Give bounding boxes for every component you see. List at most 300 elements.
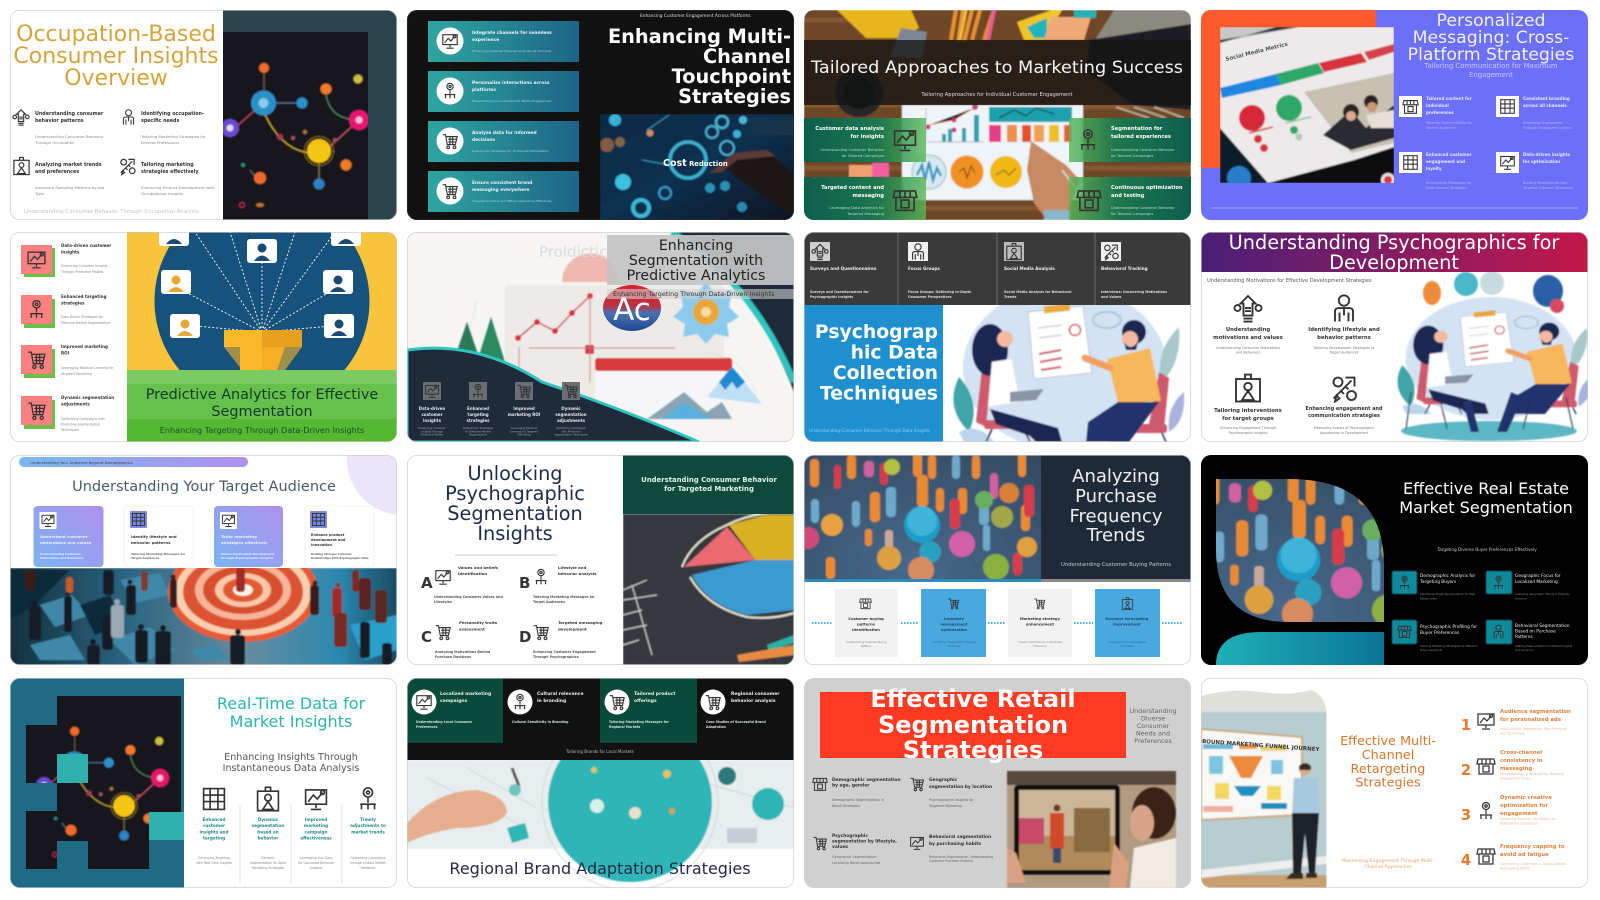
card 12: real estate segmentation [1085,455,1588,752]
subtitle: Enhancing Insights Through [224,752,358,763]
card: enhance: Building Stronger Customer [311,553,352,556]
column: localized: Preferences [416,725,438,729]
panel: optimization: for Tailored Campaigns [1111,212,1153,216]
item: demographic: Retail Strategies [832,804,860,808]
illustration: chart scene [455,232,794,419]
column: tailored: Regional Markets [609,725,640,729]
photo: social media metrics [1220,27,1395,190]
item C: Personality traits [459,620,497,625]
title: Retargeting [1351,762,1425,777]
column: improved: campaign [305,829,327,834]
column: regional: behavior analysis [731,698,776,704]
column: dynamic: Segmentation Techniques [554,433,588,437]
photo: funnel whiteboard [1201,678,1327,888]
item D: Through Psychographics [533,655,579,659]
step: revenue: improvement [1113,622,1141,626]
item B [519,565,597,604]
title: Market Insights [230,712,352,731]
panel: segmentation: for Tailored Campaigns [1111,154,1153,158]
step 3: engagement [1500,811,1538,817]
item: lifestyle: Tailoring Development Strategies to [1314,346,1374,350]
title panel: Trends [1086,525,1145,546]
text: behavior patterns: behavior patterns [35,118,84,124]
step 1: 1 [1461,716,1471,734]
text: market trends: Analyzing market trends [35,163,102,168]
step: inventory: management [940,622,968,626]
title: Segmentation [447,502,583,525]
card: tailor: Tailor marketing [221,534,257,539]
card 3: tailored approaches [804,10,1191,220]
column: enhanced [196,789,232,865]
title: Channel [703,45,791,68]
panel: targeted content: messaging [852,193,884,199]
icon: dollar [13,110,29,125]
title: Platform Strategies [1408,45,1574,65]
item: improved ROI: Improved marketing [61,344,108,349]
title: Occupation-Based [16,22,216,47]
network image [223,32,368,220]
photo: funnel whiteboard: BOUND MARKETING FUNNEL JOURNEY [1202,739,1321,753]
item: data-driven: Data-driven customer [61,243,111,248]
item: motivations [1213,296,1283,354]
step 2: Engagement Rates [1500,776,1531,780]
panel: targeted content: Targeted Messaging [846,212,884,216]
panel: title band: Segmentation [211,404,313,420]
column: tailored [600,678,697,743]
item C: Analyzing Motivations Behind [435,650,490,654]
item: motivations: Understanding Consumer Motivations [1216,346,1280,350]
item: demographic: Identifying Target Demographics for Real [1420,592,1475,596]
item: lifestyle: Target Audiences [1328,350,1359,354]
item: behavioral [911,834,993,863]
item: geographic: Analyzing Geographic Trends in Property [1515,592,1570,596]
item: tailored content: preferences [1426,110,1454,115]
column: targeting: Data-Driven Strategies [463,427,493,430]
card 15: retail segmentation [804,678,1191,888]
text: occupation needs: specific needs [141,118,179,124]
item: behavioral: Based on Purchase [1515,628,1556,634]
header panel: Surveys and Questionnaires [810,266,877,271]
header panel [804,232,1191,305]
step: revenue: Strategies to Increase Repeat [1108,641,1146,644]
subtitle: Tailoring Approaches for Individual Customer Engagement [920,92,1073,98]
title panel: Understanding Consumer Behavior Through Data Insights [809,428,930,433]
column: localized: Understanding Local Consumer [416,720,472,724]
item: demographic: Targeting Buyers [1419,579,1457,585]
photo: planning table [407,714,794,890]
title: Enhancing [659,238,733,254]
icon: person [123,110,134,125]
column: improved: Improved [305,817,327,822]
item: geographic: Psychographic Insights for [929,798,974,802]
column: localized: Localized marketing [440,692,491,697]
red title block [820,692,1126,758]
step 3: 3 [1461,806,1471,824]
title: Regional Brand Adaptation Strategies [449,859,751,878]
item: behavioral: by purchasing habits [929,841,981,847]
card: enhance: development and [311,538,346,542]
item: geographic: Geographic Focus for [1515,574,1561,579]
column: dynamic: adjustments [557,418,586,423]
card: enhance: innovation [311,543,333,547]
column: data-driven: customer [421,412,443,417]
item: demographic: Demographic Analysis for [1420,574,1475,579]
title: Effective Retail [870,685,1076,713]
column: data-driven: Enhancing Customer [418,427,446,430]
column: tailored: Tailored product [634,692,676,697]
column: ROI: Leveraging Machine [511,427,537,430]
step 4: Overcoming Challenges in Cross-Channel [1500,862,1566,866]
text: behavior patterns: Understanding consumer [35,112,103,117]
column: enhanced: Enhanced [203,817,225,822]
header panel: Social Media Analysis [1004,266,1055,271]
column: dynamic: behavior [258,836,279,841]
title panel: Frequency [1070,506,1163,527]
subtitle: Targeting Diverse Buyer Preferences Effectively [1436,547,1537,552]
panel: customer data [804,118,926,162]
card: tailor: strategies effectively [221,540,268,545]
column: dynamic: Dynamic [561,406,581,411]
card 2: multi-channel touchpoints [407,10,794,220]
column: regional: Adaptation [706,725,727,729]
title: Psychographic [445,482,585,505]
item: geographic: Geographic [929,778,957,783]
panel: targeted content: Leveraging Data Analytics for [829,206,884,210]
header text: Enhancing Customer Engagement Across Platforms [640,13,751,19]
title: Overview [64,66,168,91]
column: improved [298,790,335,870]
photo: AR retail tablet [1007,771,1176,888]
column: targeting: targeting [467,412,489,417]
step: buying patterns [835,589,898,657]
desc: marketing: Diverse Professions [141,140,179,145]
panel: title band [127,370,397,442]
column: targeting: strategies [467,418,490,423]
step 1: for personalized ads [1500,717,1561,723]
step 3: Measuring Success: Key Metrics for [1500,817,1556,821]
item: data-driven [21,243,111,277]
title panel [607,235,794,285]
photo: data pegs [1085,464,1493,752]
item: behavioral: Behavioral Segmentation [1515,624,1569,629]
title panel [804,305,943,442]
column: dynamic: based on [257,829,279,834]
item B: Tailoring Marketing Messages for [533,595,595,599]
teal shape [1216,632,1384,665]
item: behavioral [1486,620,1573,652]
card: motivations: Understanding Customer [40,552,81,556]
header panel: Behavioral Tracking [1101,266,1148,271]
column: improved: Analysis [310,866,323,870]
panel: ensure: Ensure consistent brand [472,181,532,186]
column: targeting: Enhanced [467,406,489,411]
item: motivations: motivations and values [1213,335,1283,341]
column: targeting: for Effective Market [465,429,491,433]
panel: customer data: Customer data analysis [815,126,884,132]
column: ROI [508,382,541,437]
item D: Targeted messaging [558,620,602,625]
step: buying patterns: Understanding Customer Buying [846,641,886,644]
green header panel: Understanding Consumer Behavior [641,476,777,484]
header panel: Psychographic Insights [810,295,853,299]
item: lifestyle: Identifying lifestyle and [1308,327,1380,333]
card 10: psychographic segmentation [407,455,794,665]
item: enhanced engagement: Enhanced customer [1426,152,1471,157]
item: tailored content: Tailoring Communication for [1426,121,1472,125]
logo circle [603,285,661,331]
column: cultural: Cultural relevance [537,692,584,697]
title: Understanding Your Target Audience [72,479,336,495]
item C: C [421,628,432,646]
item: geographic: Localized Marketing [1515,579,1558,585]
item: enhanced engagement: Multi-Channel Strategies [1426,186,1467,190]
title: Unlocking [467,462,563,485]
green header panel: for Targeted Marketing [664,485,754,493]
title: Effective Multi- [1340,734,1436,749]
title: Personalized [1437,11,1545,31]
pill label: Understanding Your Audience Beyond Demographics [30,460,133,465]
item: psychographic: Localizing Retail Approaches [832,861,881,865]
title: Predictive Analytics [627,268,765,284]
dark corner panel [407,348,699,442]
step: inventory: optimization [941,628,967,632]
header panel: and Values [1101,295,1121,299]
item D [519,620,603,659]
footer text: Channel Approaches [1364,864,1412,870]
logo circle: Ac [613,292,651,328]
panel: targeted content: Targeted content and [821,185,884,191]
item: psychographic: values [832,844,848,850]
card: lifestyle: Tailoring Marketing Messages for [131,552,185,556]
column: dynamic [250,787,286,870]
column: localized: campaigns [440,698,468,704]
item: data-driven: Enhancing Customer Insights [61,264,108,268]
step: buying patterns: Patterns [861,644,872,648]
column: regional [700,690,780,729]
card 6: predictive segmentation [407,232,794,442]
title: Market Segmentation [1399,498,1573,517]
card 13: real-time data [0,678,397,888]
network image [0,679,251,886]
item D: development [558,626,587,632]
item A [421,565,503,604]
text: tailoring: strategies effectively [141,169,199,175]
card 11: purchase frequency [744,445,1191,685]
side text: Consumer [1137,722,1170,730]
column: dynamic [554,382,588,437]
panel: segmentation: tailored experiences [1111,134,1171,140]
item: geographic [911,777,992,808]
card: lifestyle: Target Audiences [131,556,159,560]
item: psychographic: Buyer Preferences [1420,630,1460,636]
illustration: interview [953,286,1184,450]
card: lifestyle [124,506,193,567]
card 14: regional brand [407,678,794,890]
item: enhanced targeting: Enhanced targeting [61,294,107,299]
column: regional: Case Studies of Successful Brand [706,720,766,724]
item: improved ROI [21,344,114,378]
card: lifestyle: behavior patterns [131,540,171,545]
item: interventions: Tailoring interventions [1214,408,1282,414]
column: improved: effectiveness [300,836,332,841]
panel: ensure [428,171,579,212]
step: marketing: Marketing strategy [1020,617,1060,621]
panel: hero illustration [127,194,397,408]
item A: A [421,574,433,592]
step 3: Dynamic creative [1500,795,1552,801]
title: Segmentation [878,711,1068,739]
desc: product: Occupational Insights [141,191,183,196]
panel: ensure: messaging everywhere [472,187,529,193]
item: engagement [1306,378,1383,435]
card 7: psychographic data collection [804,232,1191,450]
item: behavioral: Behavioral Segmentation: Understanding [929,855,993,859]
header panel: Trends [1004,295,1016,299]
panel: customer data: for insights [850,134,884,140]
item: consistent branding: across all channels [1523,103,1567,108]
item: demographic [1392,571,1475,600]
item: psychographic: Psychographic Profiling for [1420,625,1477,630]
card: motivations: motivations and values [40,540,92,545]
column: timely: market trends [351,829,385,834]
title panel: Techniques [820,384,938,404]
item B: Lifestyle and [558,565,586,570]
item: interventions: Enhancing Engagement Through [1220,426,1276,430]
desc: spending: Type [34,191,45,196]
column: data-driven: Data-driven [419,406,445,411]
header panel: Focus Groups [908,266,940,271]
step: marketing [1008,589,1072,657]
item: tailored content: Tailored content for [1426,96,1472,101]
item: tailored content [1399,96,1473,130]
side text: Needs and [1136,730,1170,738]
column: dynamic: segmentation [252,823,284,828]
subtitle: Tailoring Communication for Maximum [1424,62,1558,70]
text: occupation needs: Identifying occupation- [141,112,204,117]
header panel: Surveys and Questionnaires for [810,290,869,294]
column: dynamic: Marketing Strategies [252,866,284,870]
item: consistent branding: Enhancing Engagement [1523,121,1562,125]
column: ROI: Learning for Targeted [510,429,538,433]
item: behavioral: and Decisions [1515,648,1534,652]
pill label [19,457,248,467]
step 2 [1461,750,1564,780]
item A: Values and beliefs [458,565,498,570]
photo: chalk pie chart [623,512,794,665]
item: data-driven insights: Data-driven insights [1523,152,1570,157]
subtitle: Enhancing Targeting Through Data-Driven Insights [613,290,775,298]
panel: ensure: Integrating Online and Offline Interactions Effectively [472,199,552,203]
item: consistent branding: Consistent branding [1523,96,1570,101]
panel: integrate: Enhancing Customer Experience Across All Channels [472,49,552,53]
subtitle: Instantaneous Data Analysis [223,763,359,774]
subtitle [607,289,794,299]
item: geographic [1486,571,1570,600]
step: revenue: Revenue forecasting [1106,617,1148,621]
item D: D [519,628,531,646]
card: motivations: Understand customer [40,534,88,539]
title: Enhancing Multi- [608,25,791,48]
item: data-driven insights [1496,152,1573,190]
item C: Purchase Decisions [435,655,471,659]
panel: integrate: Integrate channels for seamless [472,31,552,36]
item: demographic: Estate Sales [1420,596,1437,600]
item: psychographic: segmentation by lifestyle, [832,838,897,844]
item: psychographic: Tailoring Marketing Strategies for Different [1420,644,1477,648]
step 4: 4 [1461,851,1471,869]
desc: marketing: Tailoring Marketing Strategies for [141,134,206,139]
title: Consumer Insights [13,44,219,69]
column: improved: Leveraging Live Data [300,856,332,860]
column: ROI: Improved [513,406,535,411]
column: ROI: marketing ROI [508,412,541,417]
panel: title band: Enhancing Targeting Through Data-Driven Insights [160,425,364,435]
subtitle: Engagement [1469,71,1513,79]
title: Real-Time Data for [217,694,365,713]
title: Strategies [903,736,1043,764]
step 3 [1461,795,1557,826]
column: data-driven: Insights Through [421,429,443,433]
header panel: Consumer Perspectives [908,295,952,299]
panel: segmentation: Segmentation for [1111,126,1162,132]
footer text: Maximizing Engagement Through Multi- [1342,859,1434,864]
step 3: optimization for [1500,803,1548,809]
item: demographic [813,777,901,808]
item: data-driven insights: Targeted Outreach Techniques [1522,186,1573,190]
icon: arrow [121,159,135,175]
item: geographic: Demand [1515,596,1527,600]
title panel: hic Data [851,342,938,364]
illustration: interview with floating icons [1397,271,1591,441]
card: enhance: Relationships With Psychographic Data [311,556,369,560]
title panel: Understanding Customer Buying Patterns [1061,562,1171,568]
column: enhanced: with Real-Time Insights [196,861,232,865]
item: interventions [1214,374,1282,435]
column: dynamic: Optimizing Campaigns [556,427,586,430]
card 4: personalized messaging [1201,10,1588,220]
item C: assessment [459,626,485,632]
item: dynamic: adjustments [61,402,90,406]
panel: analyze: decisions [472,137,495,143]
item: enhanced engagement: loyalty [1426,166,1442,171]
desc: behavior: Through Occupation [34,140,75,145]
item: engagement: Enhancing engagement and [1306,406,1382,412]
item: data-driven: Through Predictive Models [60,270,104,274]
item A: Understanding Consumer Values and [434,595,503,599]
panel: optimization: and testing [1111,193,1145,199]
step: buying patterns: identification [852,628,880,632]
card: enhance [305,506,374,567]
step 2: 2 [1461,761,1471,779]
step 4: Retargeting Efforts [1500,866,1530,870]
item: geographic: segmentation by location [929,784,992,790]
item: enhanced targeting: Effective Market Segmentation [61,321,110,325]
text: tailoring: Tailoring marketing [141,163,194,168]
step 4: Frequency capping to [1500,844,1565,850]
item: behavioral: Utilizing Data Analytics for Market Insights [1515,644,1572,648]
item: interventions: Psychographic Insights [1229,431,1268,435]
step: buying patterns: patterns [857,622,876,626]
item: enhanced targeting [21,294,110,328]
item: data-driven: insights [61,250,80,254]
item: data-driven insights: Building Relationships with [1523,181,1567,185]
title panel [1041,455,1191,579]
card: lifestyle: Identify lifestyle and [131,534,177,539]
item: demographic: Demographic Segmentation in [832,798,884,802]
item: engagement: Approaches in Development [1320,431,1369,435]
item: enhanced engagement: Streamlining Messaging for [1426,181,1471,185]
step 4: avoid ad fatigue [1500,852,1549,858]
